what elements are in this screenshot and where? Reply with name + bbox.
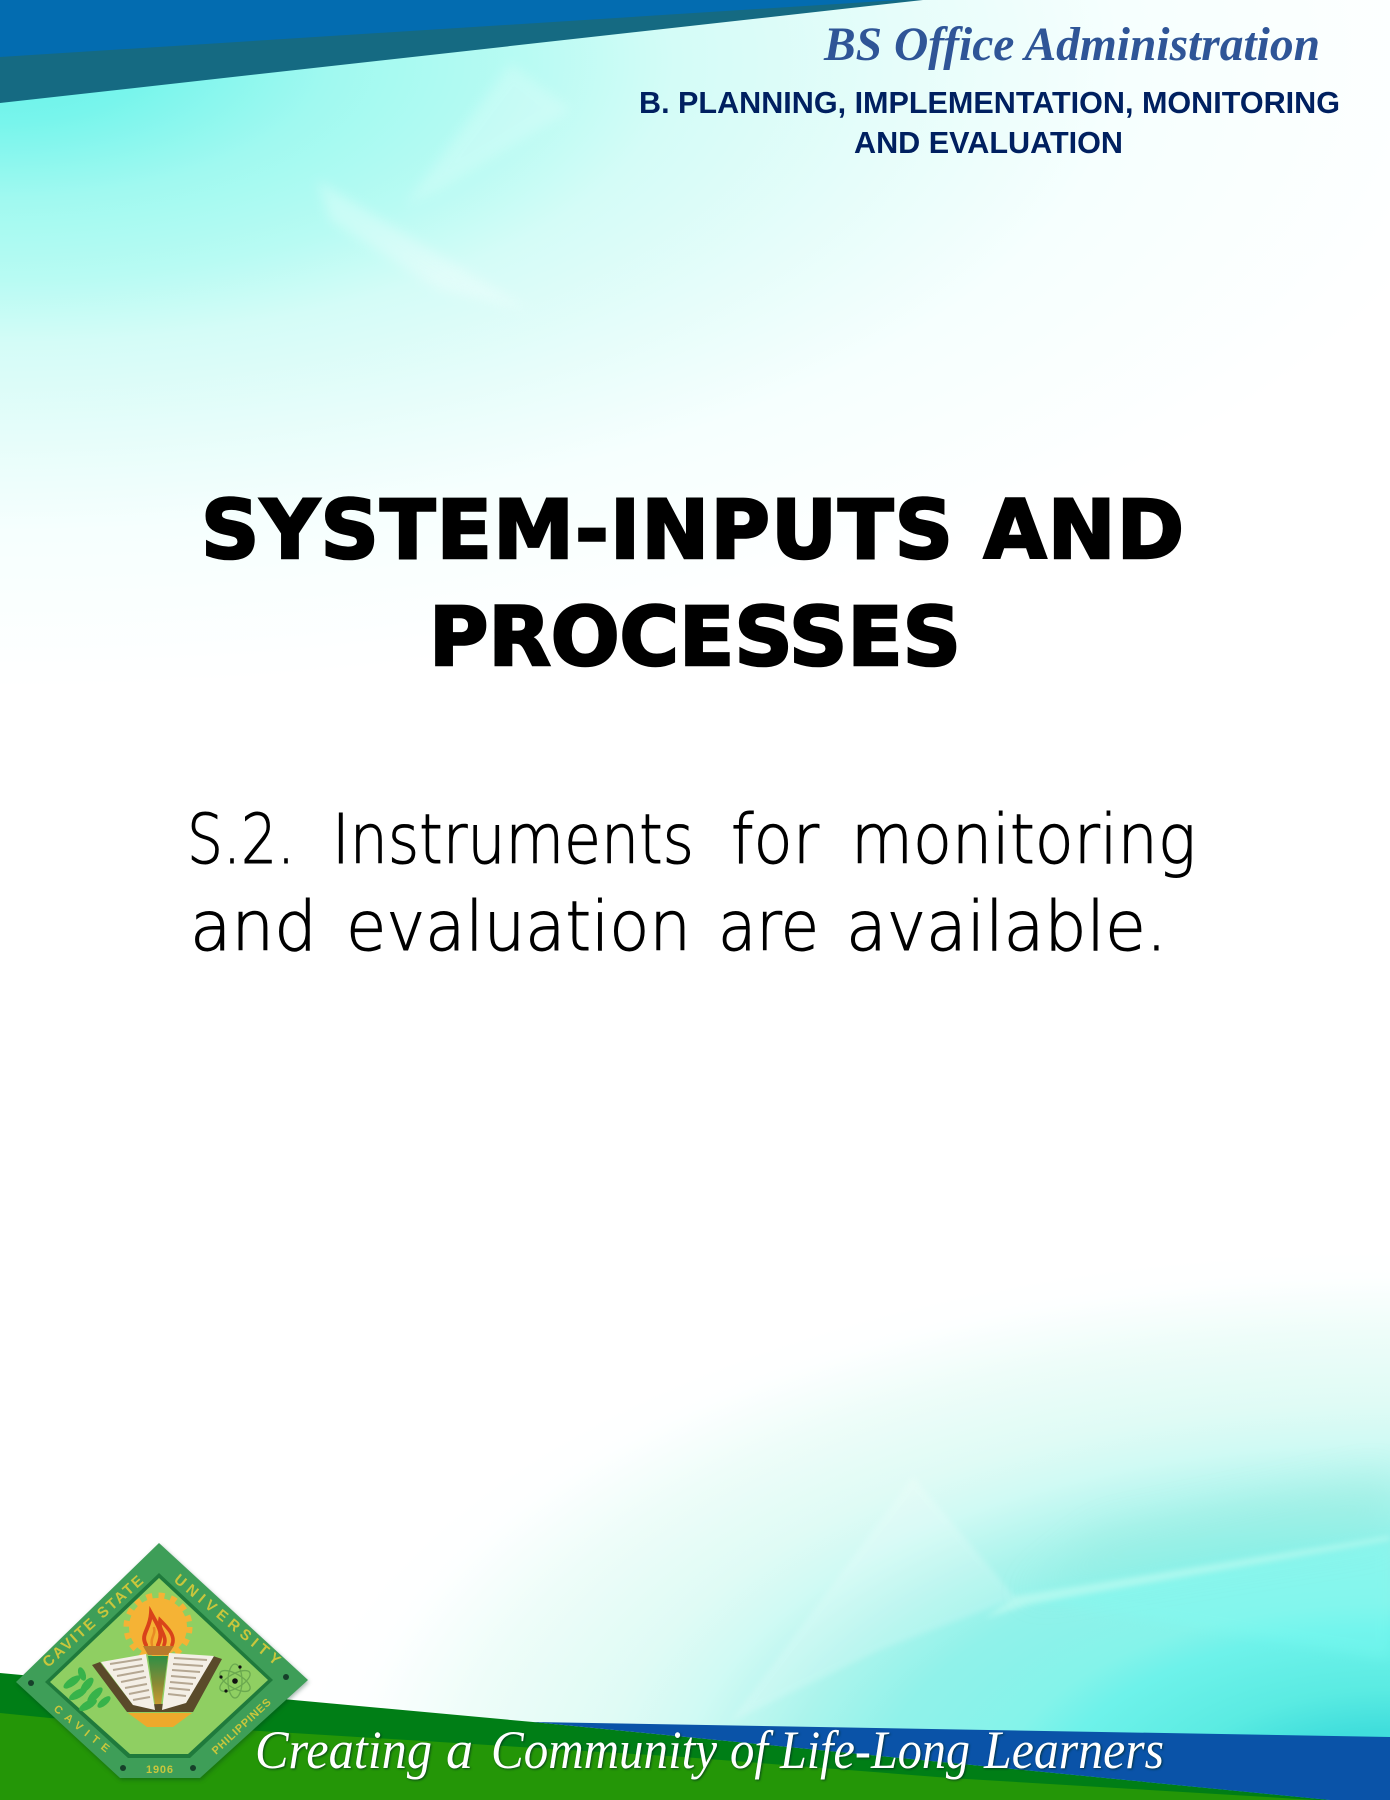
- main title: [201, 484, 1184, 685]
- subheading: area title: AND EVALUATION: [854, 125, 1123, 160]
- logo: Cavite State University seal: [16, 1543, 308, 1778]
- bottom colour bands: [0, 1673, 1390, 1800]
- body statement: Instruments: [332, 800, 694, 880]
- logo flame: [144, 1613, 173, 1645]
- body statement: evaluation: [346, 887, 691, 967]
- logo ring text: 1906: [146, 1764, 173, 1776]
- subheading: area title: [639, 85, 1340, 160]
- motto script: Creating: [255, 1720, 432, 1780]
- logo torch: [143, 1646, 174, 1712]
- heading: BS Office Administration: BS Office Administration: [823, 18, 1320, 71]
- body statement: S.2.: [187, 800, 295, 880]
- body statement: for: [731, 800, 820, 880]
- subheading: area title: B. PLANNING, IMPLEMENTATION, MONITORING: [639, 85, 1340, 120]
- body statement: monitoring: [851, 800, 1196, 880]
- logo dots: [28, 1674, 289, 1771]
- logo ring text: CAVITE STATE: [39, 1572, 147, 1671]
- body statement: and: [190, 887, 317, 967]
- logo plant: [62, 1666, 112, 1713]
- motto script: of: [730, 1720, 774, 1780]
- body statement: [187, 800, 1196, 967]
- logo gear: [128, 1713, 192, 1727]
- logo open book: [92, 1653, 222, 1712]
- main title: SYSTEM-INPUTS AND: [201, 484, 1184, 578]
- logo ring text: CAVITE: [51, 1703, 112, 1755]
- body statement: available.: [846, 887, 1167, 967]
- logo atom: [217, 1664, 253, 1698]
- logo ring text: UNIVERSITY: [170, 1571, 284, 1669]
- motto script: a: [446, 1720, 473, 1780]
- main title: PROCESSES: [429, 591, 961, 685]
- logo ring text: PHILIPPINES: [210, 1697, 274, 1757]
- motto script: [255, 1720, 1164, 1780]
- top banner: [0, 0, 923, 103]
- motto script: Life-Long: [779, 1720, 970, 1780]
- motto script: Community: [491, 1720, 717, 1780]
- logo sun: [127, 1596, 189, 1658]
- logo ring text: [39, 1571, 284, 1776]
- motto script: Learners: [983, 1720, 1164, 1780]
- body statement: are: [718, 887, 819, 967]
